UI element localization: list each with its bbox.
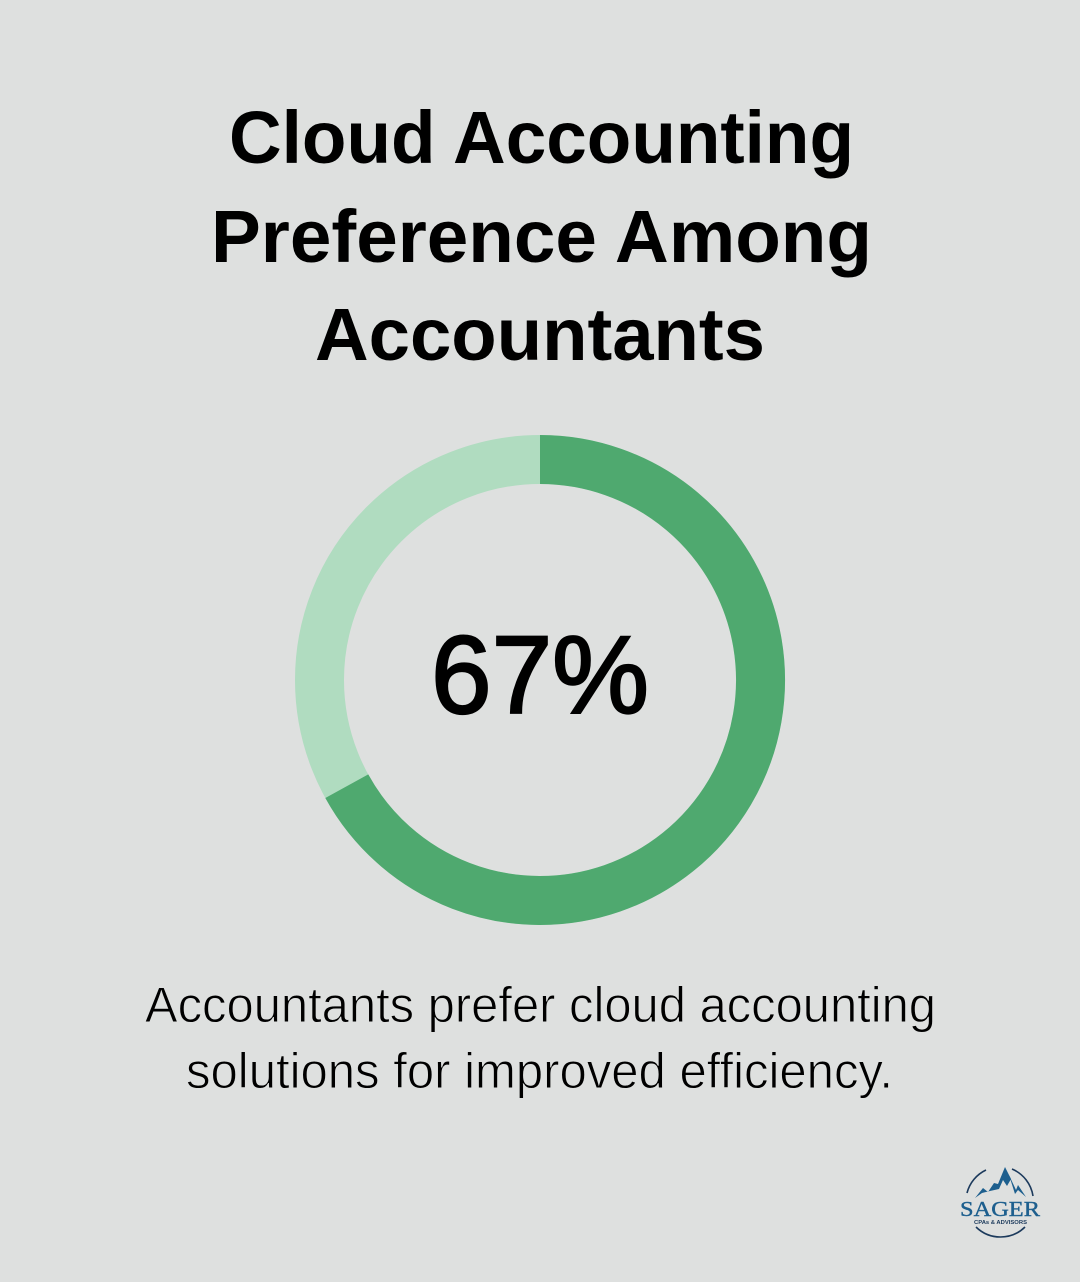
logo: Sager CPAs & Advisors: [960, 1167, 1040, 1237]
title: Cloud Accounting: [229, 96, 854, 179]
donut chart: 67%: [320, 460, 761, 900]
title: [211, 96, 872, 376]
title: Accountants: [315, 293, 765, 376]
logo: Sager CPAs & Advisors: CPAs & ADVISORS: [974, 1220, 1028, 1226]
description text: solutions for improved efficiency.: [186, 1043, 893, 1099]
description text: Accountants prefer cloud accounting: [145, 977, 936, 1033]
title: Preference Among: [211, 195, 872, 278]
logo: Sager CPAs & Advisors: SAGER: [960, 1197, 1040, 1221]
percentage value: 67%: [431, 614, 649, 737]
description text: [145, 977, 936, 1099]
